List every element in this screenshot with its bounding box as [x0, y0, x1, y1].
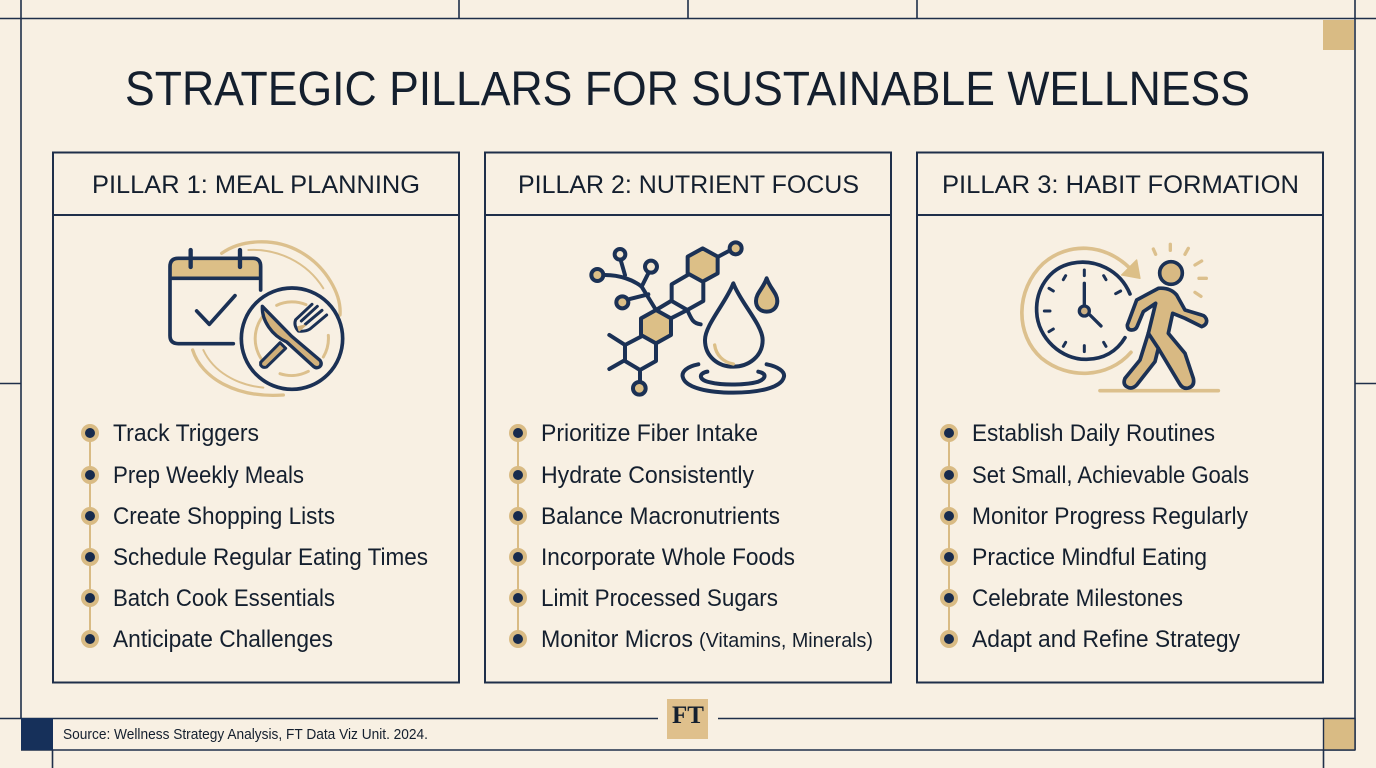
heading: pillar 2: PILLAR 2: NUTRIENT FOCUS — [518, 171, 859, 199]
bullet list: pillar 2: (Vitamins, Minerals) — [699, 630, 873, 652]
bullet list: pillar 2: Limit Processed Sugars — [541, 585, 778, 612]
panel: pillar 1 meal planning — [53, 152, 459, 682]
bullet list: pillar 1: Anticipate Challenges — [113, 626, 333, 653]
heading: pillar 3: PILLAR 3: HABIT FORMATION — [942, 171, 1299, 199]
bullet list: pillar 1: Batch Cook Essentials — [113, 585, 335, 612]
bullet list: pillar 3: Set Small, Achievable Goals — [972, 462, 1249, 489]
bullet list: pillar 2: Hydrate Consistently — [541, 462, 754, 489]
bullet list: pillar 3 — [940, 420, 1249, 653]
bullet list: pillar 3: Practice Mindful Eating — [972, 544, 1207, 571]
icon: calendar and plate — [170, 242, 343, 395]
icon: clock and walking person — [1022, 244, 1218, 391]
bullet list: pillar 2: Monitor Micros — [541, 626, 693, 653]
source note: Source: Wellness Strategy Analysis, FT Data Viz Unit. 2024. — [63, 726, 428, 743]
title: STRATEGIC PILLARS FOR SUSTAINABLE WELLNESS — [125, 63, 1250, 116]
icon: molecule and water drop — [591, 242, 784, 395]
corner square: bottom left — [21, 718, 53, 750]
bullet list: pillar 3: Celebrate Milestones — [972, 585, 1183, 612]
bullet list: pillar 2: Incorporate Whole Foods — [541, 544, 795, 571]
corner square: top right — [1323, 20, 1354, 50]
heading: pillar 1: PILLAR 1: MEAL PLANNING — [92, 171, 420, 199]
bullet list: pillar 1: Track Triggers — [113, 420, 259, 447]
panel: pillar 3 habit formation — [917, 152, 1323, 682]
bullet list: pillar 2 — [509, 420, 873, 653]
bullet list: pillar 1 — [81, 420, 428, 653]
bullet list: pillar 3: Monitor Progress Regularly — [972, 503, 1248, 530]
bullet list: pillar 3: Establish Daily Routines — [972, 420, 1215, 447]
FT logo badge: FT — [672, 702, 704, 729]
FT logo badge — [667, 699, 708, 739]
bullet list: pillar 2: Balance Macronutrients — [541, 503, 780, 530]
corner square: bottom right — [1324, 718, 1355, 750]
bullet list: pillar 1: Create Shopping Lists — [113, 503, 335, 530]
bullet list: pillar 3: Adapt and Refine Strategy — [972, 626, 1240, 653]
panel: pillar 2 nutrient focus — [485, 152, 891, 682]
bullet list: pillar 1: Schedule Regular Eating Times — [113, 544, 428, 571]
bullet list: pillar 2: Prioritize Fiber Intake — [541, 420, 758, 447]
bullet list: pillar 1: Prep Weekly Meals — [113, 462, 304, 489]
